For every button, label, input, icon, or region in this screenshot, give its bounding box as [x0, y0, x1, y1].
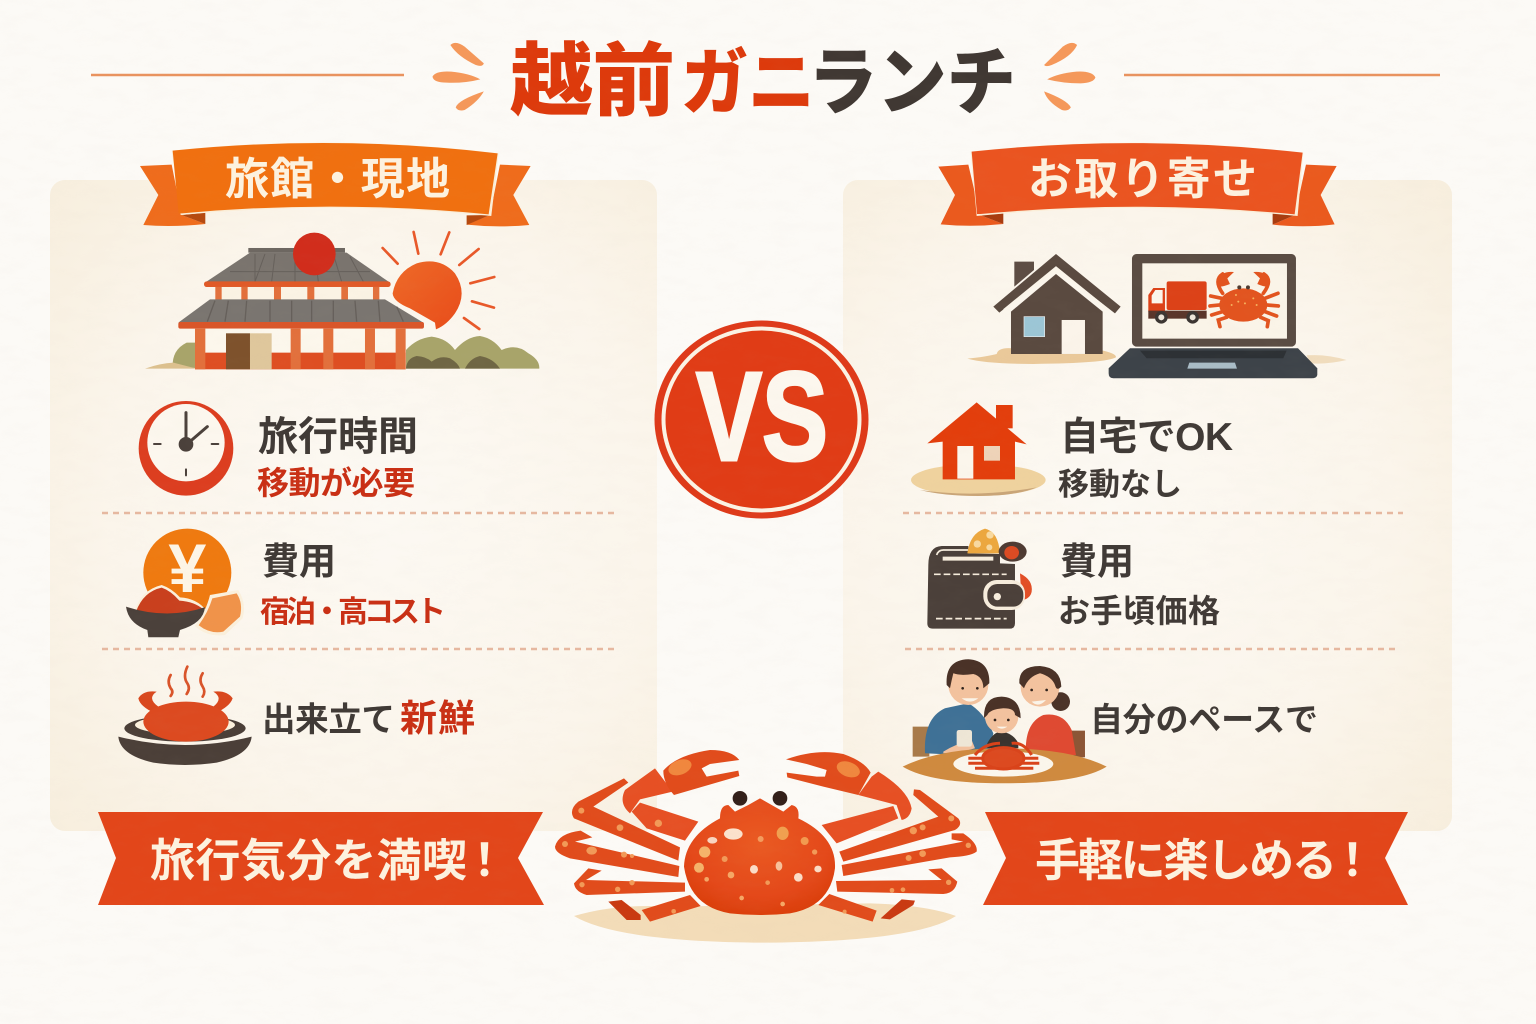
title: ガニ [681, 44, 815, 124]
text: fresh: 新鮮 [400, 698, 475, 739]
icon: red house [911, 402, 1046, 496]
icon: red sun ball [293, 233, 336, 275]
icon: family eating crab [903, 659, 1107, 783]
dad [925, 703, 993, 755]
icon: sun [393, 261, 462, 329]
icon: dark house [993, 254, 1121, 354]
icon: ryokan building [178, 248, 424, 369]
title [91, 37, 1440, 126]
crab on plate [968, 743, 1039, 769]
row: own pace [903, 659, 1318, 783]
icon: yen coin and food bowl [126, 529, 244, 637]
illustration: ryokan with sun [145, 232, 539, 369]
ribbon: travel mood: ！ [462, 835, 507, 886]
text: cost heading: 費用 [1060, 541, 1134, 582]
title: ランチ [808, 41, 1016, 124]
text: no travel: 移動なし [1058, 467, 1182, 502]
row: travel time [139, 401, 418, 501]
heading ribbon: mail order [938, 143, 1337, 226]
ribbon: casual enjoyment [983, 812, 1408, 905]
icon: sun rays [383, 232, 494, 329]
icon: title sparks [432, 43, 1095, 110]
mom [1026, 714, 1076, 755]
row dividers [102, 513, 1403, 649]
row: cost, mail order [927, 529, 1220, 629]
crab body [684, 798, 835, 915]
icon: delivery truck [1148, 281, 1207, 324]
icon: small crab on screen [1210, 272, 1278, 327]
illustration: snow crab [555, 750, 977, 943]
text: affordable price: お手頃価格 [1058, 593, 1220, 629]
ribbon: casual enjoyment: ！ [1330, 835, 1375, 886]
icon: laptop with truck and crab [1109, 254, 1317, 378]
text: lodging high cost: 宿泊・高コスト [260, 596, 446, 629]
heading ribbon: ryokan: 旅館・現地 [225, 155, 450, 204]
text: cost heading: 費用 [262, 541, 336, 582]
text: freshly made: 出来立て [262, 702, 395, 739]
icon: clock [139, 401, 233, 496]
text: travel required: 移動が必要 [257, 465, 415, 501]
crab body spots [694, 827, 822, 906]
illustration: house and laptop [967, 254, 1347, 378]
crab right claw [786, 752, 912, 843]
text: travel time: 旅行時間 [258, 415, 418, 459]
text: own pace: 自分のペースで [1090, 701, 1318, 738]
crab left claw [623, 750, 739, 841]
ribbon: travel mood [98, 812, 544, 905]
row: freshly made [118, 667, 475, 765]
icon: wallet [927, 529, 1032, 629]
crab eyes [733, 791, 787, 806]
VS badge: VS [696, 346, 828, 487]
crab left legs [555, 778, 701, 922]
icon: yen coin and food bowl: ¥ [168, 531, 206, 607]
child [987, 732, 1018, 748]
heading ribbon: ryokan [140, 143, 531, 226]
crab right legs [818, 789, 977, 922]
icon: bushes [173, 336, 539, 369]
ribbon: travel mood: 旅行気分を満喫 [150, 835, 467, 886]
ribbon: casual enjoyment: 手軽に楽しめる [1035, 835, 1337, 886]
crab leg spots [562, 808, 971, 914]
row: at home [911, 402, 1233, 502]
heading ribbon: mail order: お取り寄せ [1028, 155, 1257, 204]
panel: ryokan and local [50, 180, 657, 831]
text: OK at home: 自宅でOK [1060, 416, 1233, 459]
VS badge [654, 320, 868, 518]
panel: mail order [843, 180, 1452, 831]
table [903, 748, 1107, 783]
title: 越前 [510, 37, 675, 126]
icon: sand shadow [967, 348, 1116, 364]
row: cost, ryokan [126, 529, 446, 637]
icon: hot crab plate [118, 667, 252, 765]
